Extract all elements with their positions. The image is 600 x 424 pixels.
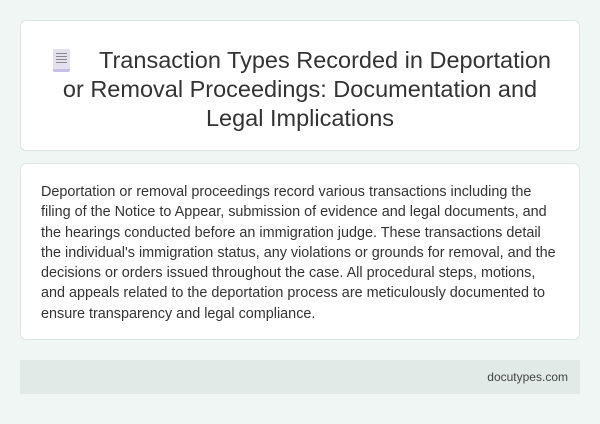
description text: the hearings conducted before an immigration judge. These transactions detail <box>41 225 541 241</box>
footer <box>20 360 580 394</box>
description text <box>41 184 556 322</box>
footer: docutypes.com <box>487 370 568 384</box>
description text: ensure transparency and legal compliance. <box>41 306 315 322</box>
icon: receipt <box>53 49 70 72</box>
title: Legal Implications <box>206 105 394 131</box>
body card <box>20 163 580 340</box>
description text: and appeals related to the deportation process are meticulously documented to <box>41 285 545 301</box>
title: or Removal Proceedings: Documentation and <box>63 76 537 102</box>
description text: the individual's immigration status, any violations or grounds for removal, and the <box>41 245 556 261</box>
description text: decisions or orders issued throughout the case. All procedural steps, motions, <box>41 265 535 281</box>
header card <box>20 20 580 151</box>
title <box>63 47 551 131</box>
title: Transaction Types Recorded in Deportation <box>99 47 551 73</box>
description text: filing of the Notice to Appear, submission of evidence and legal documents, and <box>41 204 547 220</box>
description text: Deportation or removal proceedings record various transactions including the <box>41 184 531 200</box>
